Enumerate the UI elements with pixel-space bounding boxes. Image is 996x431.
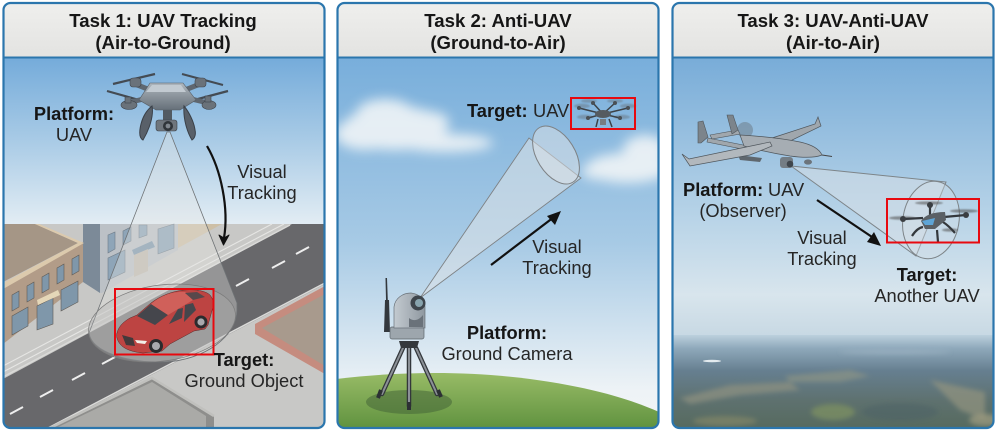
label: visual tracking (522, 236, 592, 278)
target bounding box (115, 289, 214, 354)
sky background (337, 57, 659, 429)
bottom building (48, 378, 214, 429)
label: visual tracking: Tracking (227, 182, 297, 203)
label: visual tracking: Visual (237, 161, 287, 182)
sky background (3, 57, 325, 225)
header: Task 2: Task 2: Anti-UAV (424, 10, 572, 31)
label: platform UAV: UAV (56, 124, 93, 145)
label: target another UAV (874, 264, 980, 306)
label: target another UAV: Another UAV (874, 285, 980, 306)
arrow: visual tracking (491, 211, 561, 265)
label: visual tracking: Visual (532, 236, 582, 257)
header: Task 3: Task 3: UAV-Anti-UAV (737, 10, 929, 31)
header: Task 1: Task 1: UAV Tracking (69, 10, 257, 31)
label: platform observer (683, 179, 805, 221)
label: target UAV (467, 100, 570, 121)
pink building (255, 286, 325, 374)
far buildings (83, 224, 222, 293)
header: Task 3 (672, 3, 994, 58)
header: Task 1 (4, 3, 324, 58)
label: platform UAV: Platform: (34, 103, 114, 124)
arrow: visual tracking (817, 200, 881, 246)
ground scene (3, 224, 325, 429)
label: target ground object (185, 349, 303, 391)
hill (337, 373, 659, 429)
label: visual tracking (227, 161, 297, 203)
clouds (335, 99, 670, 183)
icon: quadcopter (107, 74, 228, 140)
sky background (672, 57, 994, 337)
panel: Task 3 UAV-Anti-UAV (672, 3, 996, 429)
header: Task 2 (338, 3, 658, 58)
label: visual tracking: Tracking (787, 248, 857, 269)
earth horizon (672, 335, 996, 429)
icon: target quadcopter (889, 201, 978, 242)
icon: fixed-wing observer UAV (682, 115, 832, 168)
label: platform UAV (34, 103, 114, 145)
label: target another UAV: Target: (897, 264, 957, 285)
icon: target octocopter (574, 99, 636, 127)
label: platform ground camera: Platform: (467, 322, 547, 343)
header: Task 3: (Air-to-Air) (786, 32, 880, 53)
header: Task 2: (Ground-to-Air) (430, 32, 566, 53)
label: target UAV: UAV (533, 100, 570, 121)
label: target ground object: Target: (214, 349, 274, 370)
icon: ground camera on tripod (378, 278, 441, 410)
label: target ground object: Ground Object (185, 370, 303, 391)
header: Task 1: (Air-to-Ground) (95, 32, 231, 53)
label: platform observer: (Observer) (699, 200, 787, 221)
view cone (420, 118, 589, 298)
label: visual tracking (787, 227, 857, 269)
target bounding box (887, 199, 979, 242)
label: visual tracking: Visual (797, 227, 847, 248)
target bounding box (571, 98, 635, 129)
label: platform observer: Platform: (683, 179, 763, 200)
left building (3, 224, 84, 344)
arrow: visual tracking (207, 146, 229, 245)
label: platform observer: UAV (768, 179, 805, 200)
view cone (791, 166, 965, 263)
label: platform ground camera (441, 322, 573, 364)
label: visual tracking: Tracking (522, 257, 592, 278)
camera view cone (83, 132, 241, 371)
panel: Task 1 UAV Tracking (3, 3, 325, 429)
icon: red car (117, 290, 213, 353)
label: target UAV: Target: (467, 100, 528, 121)
road (3, 224, 325, 429)
label: platform ground camera: Ground Camera (441, 343, 573, 364)
panel: Task 2 Anti-UAV (335, 3, 670, 429)
